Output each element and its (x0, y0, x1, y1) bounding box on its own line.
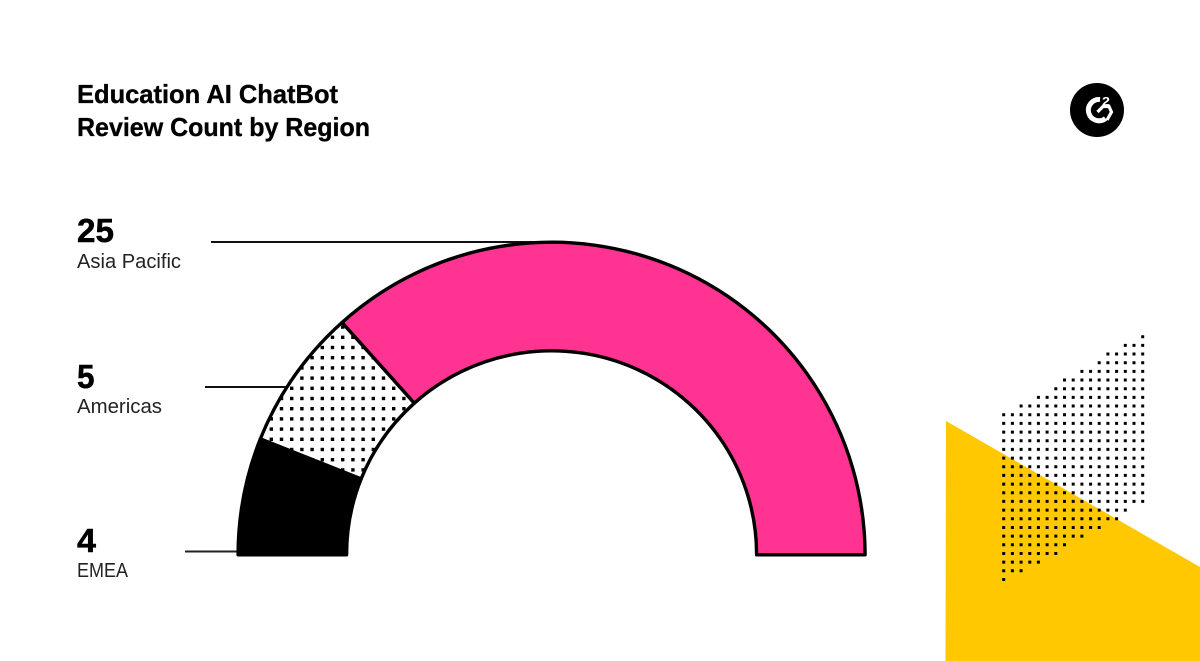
label: EMEA: EMEA (77, 560, 129, 582)
leader line: EMEA (185, 550, 238, 552)
segment: EMEA (238, 439, 361, 555)
segment: Asia Pacific (342, 242, 865, 555)
segment: Americas (260, 322, 414, 479)
label: Americas: 5 (77, 358, 94, 395)
title: Review Count by Region (77, 112, 370, 142)
decorative dot parallelogram (1004, 335, 1143, 581)
title (77, 79, 370, 142)
decorative yellow triangle (946, 421, 1200, 661)
leader line: Americas (205, 386, 288, 388)
label: Asia Pacific (77, 212, 181, 273)
label: EMEA (77, 522, 129, 582)
title: Education AI ChatBot (77, 79, 338, 109)
label: Asia Pacific: 25 (77, 212, 114, 249)
icon: G2 logo (1070, 83, 1124, 137)
label: EMEA: 4 (77, 522, 97, 559)
label: Asia Pacific: Asia Pacific (77, 251, 181, 273)
semi-donut chart (238, 242, 865, 555)
label: Americas (77, 358, 162, 418)
leader line: Asia Pacific (211, 241, 532, 243)
label: Americas: Americas (77, 396, 162, 418)
icon: G2 logo: 2 (1102, 96, 1110, 108)
segment: Americas dot pattern (260, 322, 414, 479)
